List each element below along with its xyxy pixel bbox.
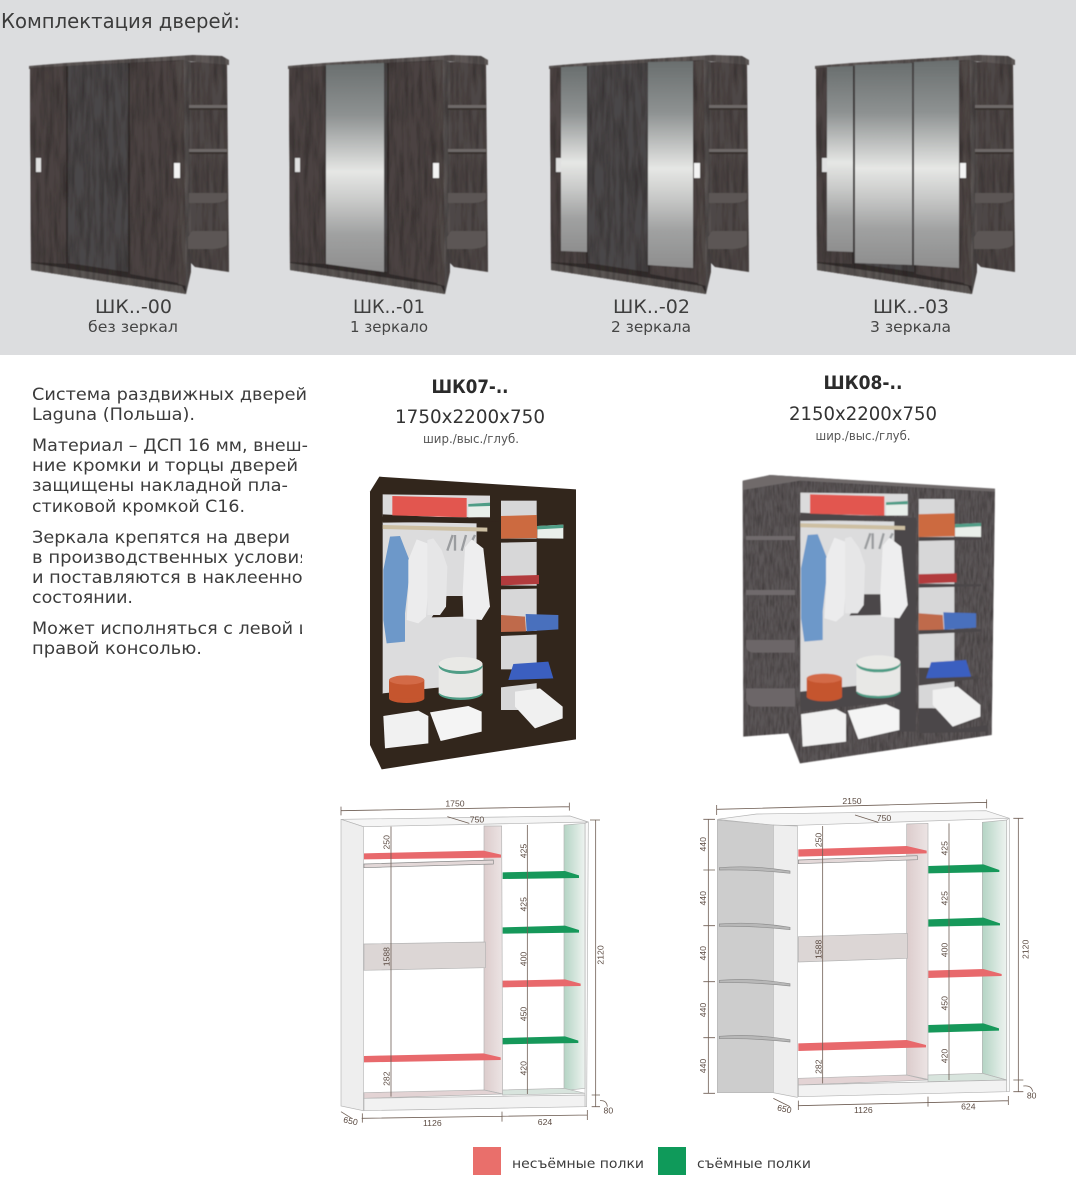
dimension labels: 624 xyxy=(538,1117,552,1127)
heading: ШК08 xyxy=(789,372,937,443)
fixed shelves xyxy=(798,846,1002,1051)
illustration: wardrobe ШК07 interior xyxy=(370,477,576,769)
dimension labels: 425 xyxy=(940,891,950,906)
heading: door options: Комплектация дверей: xyxy=(1,9,240,33)
diagram: ШК07 dimensions xyxy=(341,799,613,1128)
dimension labels: 425 xyxy=(518,844,528,858)
heading: ШК08: 2150х2200х750 xyxy=(789,403,937,425)
paragraph: mirrors xyxy=(33,530,302,603)
dimension labels: 420 xyxy=(518,1061,528,1076)
label: model 02: ШК..-02 xyxy=(613,296,690,318)
wardrobe: no mirrors xyxy=(29,55,229,294)
paragraph: console: Может исполняться с левой и xyxy=(32,619,310,638)
dimension labels: 2120 xyxy=(1020,940,1030,959)
dimension labels: 80 xyxy=(1027,1091,1037,1101)
label: removable shelves: съёмные полки xyxy=(697,1156,811,1172)
heading: ШК07: 1750х2200х750 xyxy=(395,406,545,428)
dimension labels: 1588 xyxy=(382,947,392,966)
heading: ШК07: ШК07-.. xyxy=(432,376,508,398)
label: model 03: ШК..-03 xyxy=(873,296,949,318)
dimension labels: 750 xyxy=(877,813,891,823)
label: model 00: ШК..-00 xyxy=(95,296,172,318)
paragraph: system: Laguna (Польша). xyxy=(32,405,195,424)
dimension labels: 650 xyxy=(342,1115,359,1127)
dimension labels: 440 xyxy=(698,1059,708,1073)
dimension lines xyxy=(703,799,1033,1110)
label: model 01: ШК..-01 xyxy=(353,296,425,318)
paragraph: system: Система раздвижных дверей xyxy=(32,385,307,404)
dimension labels xyxy=(342,799,613,1128)
paragraph: material xyxy=(32,436,308,516)
paragraph: material: защищены накладной пла- xyxy=(32,476,288,495)
dimension labels: 282 xyxy=(382,1071,392,1086)
paragraph: mirrors: в производственных условия xyxy=(32,548,310,567)
diagram: ШК08 dimensions xyxy=(698,796,1037,1115)
dimension labels: 420 xyxy=(940,1049,950,1063)
dimension labels: 750 xyxy=(470,815,484,825)
dimension labels xyxy=(698,796,1037,1115)
dimension labels: 2150 xyxy=(842,796,862,806)
dimension labels: 250 xyxy=(814,833,824,847)
dimension labels: 440 xyxy=(698,837,708,852)
caption: model 02: 2 зеркала xyxy=(611,318,691,336)
heading: ШК07 xyxy=(395,376,545,446)
caption: model 03: 3 зеркала xyxy=(870,318,951,336)
dimension labels: 450 xyxy=(940,996,950,1011)
paragraph: mirrors: состоянии. xyxy=(32,588,133,607)
wardrobe: three mirrors xyxy=(815,55,1015,294)
paragraph: console: правой консолью. xyxy=(32,639,202,658)
dimension labels: 1126 xyxy=(854,1105,873,1115)
dimension labels: 624 xyxy=(961,1102,976,1112)
panel: door options xyxy=(0,0,1076,355)
paragraph: material: ние кромки и торцы дверей xyxy=(32,456,298,475)
fixed shelves xyxy=(364,851,581,1062)
paragraph: mirrors: Зеркала крепятся на двери xyxy=(32,528,290,547)
caption: model 01: 1 зеркало xyxy=(350,318,428,336)
dimension labels: 1750 xyxy=(445,799,465,809)
dimension labels: 282 xyxy=(814,1059,824,1074)
dimension labels: 440 xyxy=(698,891,708,906)
paragraph: material: стиковой кромкой С16. xyxy=(32,497,245,516)
swatch: fixed shelves xyxy=(473,1147,501,1175)
dimension labels: 250 xyxy=(382,835,392,850)
dimension labels: 400 xyxy=(940,943,950,957)
dimension labels: 440 xyxy=(698,1003,708,1017)
dimension labels: 1588 xyxy=(814,940,824,959)
paragraph: mirrors: и поставляются в наклеенном xyxy=(32,568,316,587)
wardrobe: one mirror xyxy=(288,55,488,294)
removable shelves xyxy=(928,864,1000,1033)
dimension labels: 425 xyxy=(940,841,950,856)
dimension labels: 440 xyxy=(698,946,708,961)
dimension labels: 2120 xyxy=(595,945,605,965)
heading: ШК07: шир./выс./глуб. xyxy=(423,432,519,446)
text block: door system description xyxy=(32,385,316,658)
dimension labels: 425 xyxy=(518,897,528,912)
dimension labels: 450 xyxy=(518,1007,528,1021)
rod xyxy=(364,860,493,868)
swatch: removable shelves xyxy=(658,1147,686,1175)
carcass xyxy=(341,816,588,1111)
dimension labels: 80 xyxy=(604,1106,613,1116)
heading: ШК08: шир./выс./глуб. xyxy=(816,429,910,443)
dimension labels: 400 xyxy=(518,952,528,966)
dimension labels: 650 xyxy=(776,1103,793,1115)
dimension labels: 1126 xyxy=(423,1118,442,1128)
dimension lines xyxy=(341,803,607,1123)
paragraph: console xyxy=(32,619,310,658)
paragraph: system xyxy=(32,385,307,424)
console shelves xyxy=(719,867,790,1042)
wardrobe: two mirrors xyxy=(549,55,749,294)
removable shelves xyxy=(503,871,579,1044)
paragraph: material: Материал – ДСП 16 мм, внеш- xyxy=(32,436,308,455)
illustration: wardrobe ШК08 interior xyxy=(743,475,995,763)
carcass xyxy=(717,811,1009,1097)
caption: model 00: без зеркал xyxy=(88,318,178,336)
legend xyxy=(473,1147,811,1175)
rod xyxy=(798,856,917,864)
heading: ШК08: ШК08-.. xyxy=(824,372,902,394)
label: fixed shelves: несъёмные полки xyxy=(512,1156,644,1172)
